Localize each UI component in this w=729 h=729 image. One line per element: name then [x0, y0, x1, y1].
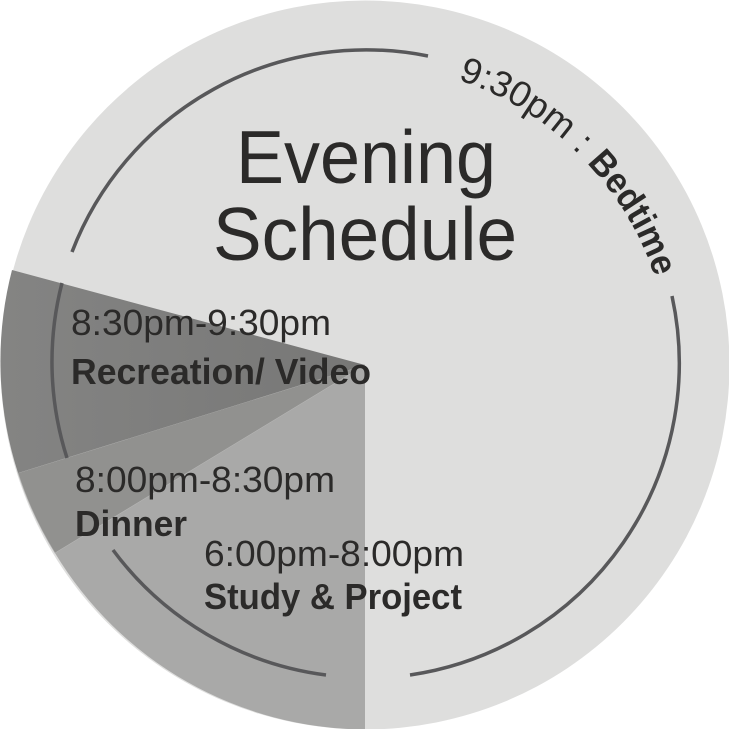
curved label: 9:30pm bedtime: 9:30pm : [462, 58, 590, 152]
curved label: 9:30pm bedtime [462, 58, 671, 274]
label: study and project: Study & Project [204, 576, 462, 617]
title: Evening [236, 115, 496, 199]
label: dinner: 8:00pm-8:30pm [75, 459, 335, 500]
title: Schedule [213, 192, 517, 276]
wedge: recreation and video [0, 270, 365, 473]
label: recreation and video: 8:30pm-9:30pm [71, 302, 331, 343]
label: dinner [75, 459, 335, 544]
label: dinner: Dinner [75, 503, 187, 544]
arc: bottom left [113, 550, 326, 675]
label: recreation and video: Recreation/ Video [71, 351, 371, 392]
wedge: dinner [18, 365, 365, 553]
curved label: 9:30pm bedtime: Bedtime [588, 148, 671, 274]
arc: left [52, 283, 67, 458]
label: study and project [204, 533, 464, 617]
label: recreation and video [71, 302, 371, 392]
arc: right [410, 296, 679, 675]
wedge: study and project [55, 365, 365, 729]
arc: top [72, 50, 428, 252]
title [213, 115, 517, 276]
label: study and project: 6:00pm-8:00pm [204, 533, 464, 574]
